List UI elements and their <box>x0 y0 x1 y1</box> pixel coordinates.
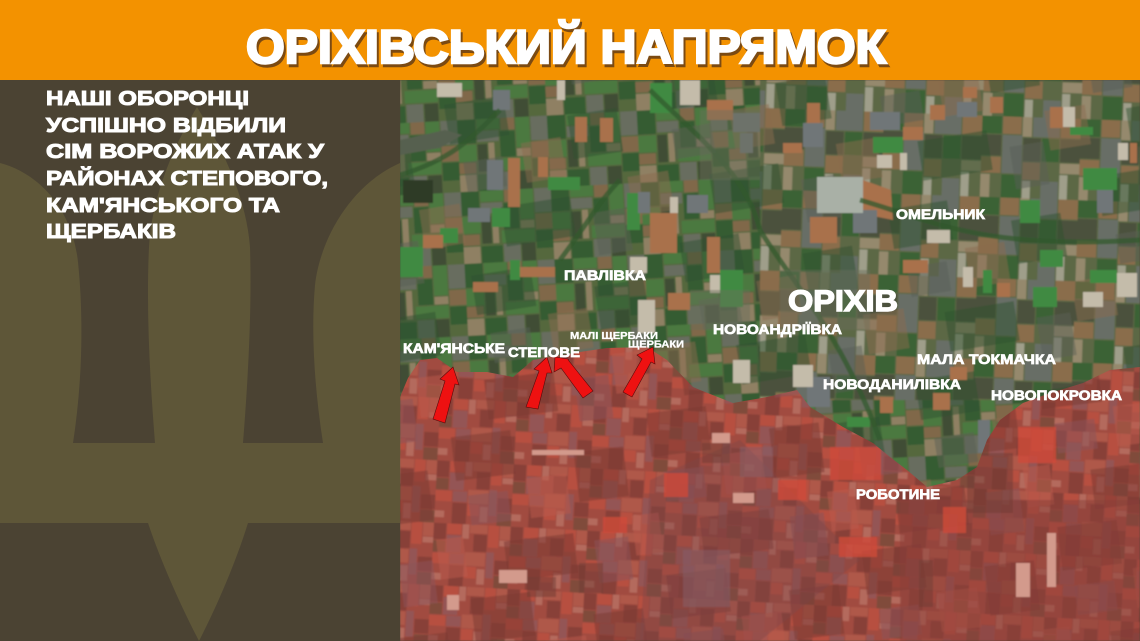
icon: trident emblem <box>0 107 400 641</box>
text block: summary: КАМ'ЯНСЬКОГО ТА <box>46 195 280 217</box>
satellite map <box>400 80 1140 641</box>
title: ОРІХІВСЬКИЙ НАПРЯМОК <box>246 20 886 73</box>
label: Novopokrovka: НОВОПОКРОВКА <box>991 387 1122 403</box>
arrow: toward Shcherbaky <box>623 347 655 397</box>
text block: summary: РАЙОНАХ СТЕПОВОГО, <box>46 166 328 190</box>
label: Shcherbaky: ЩЕРБАКИ <box>628 340 684 350</box>
title: ОРІХІВСЬКИЙ НАПРЯМОК <box>248 23 888 76</box>
label: Novodanylivka: НОВОДАНИЛІВКА <box>823 376 961 392</box>
label: Pavlivka: ПАВЛІВКА <box>564 267 646 283</box>
label: Novoandriivka: НОВОАНДРІЇВКА <box>713 321 842 337</box>
map labels <box>403 206 1122 502</box>
arrow: toward Kamianske <box>433 367 459 423</box>
map terrain: occupied area in red <box>400 340 1140 641</box>
header bar <box>0 0 1140 80</box>
label: Kamianske: КАМ'ЯНСЬКЕ <box>403 340 505 356</box>
text block: summary: ЩЕРБАКІВ <box>46 221 176 243</box>
text block: summary: УСПІШНО ВІДБИЛИ <box>46 115 286 137</box>
text block: summary: НАШІ ОБОРОНЦІ <box>46 88 249 110</box>
arrow: toward Stepove from south <box>526 357 552 409</box>
label: Orikhiv: ОРІХІВ <box>788 285 898 318</box>
label: Omelnyk: ОМЕЛЬНИК <box>896 206 985 222</box>
label: Stepove: СТЕПОВЕ <box>508 344 580 360</box>
panel: left side with trident emblem <box>0 88 400 641</box>
label: Robotyne: РОБОТИНЕ <box>856 486 940 502</box>
text block: summary <box>46 88 328 243</box>
label: Mali Shcherbaky: МАЛІ ЩЕРБАКИ <box>570 331 658 342</box>
arrow: toward Stepove from east <box>554 357 593 398</box>
label: Mala Tokmachka: МАЛА ТОКМАЧКА <box>917 351 1056 367</box>
map terrain: unoccupied fields <box>400 80 1140 500</box>
text block: summary: СІМ ВОРОЖИХ АТАК У <box>46 141 325 163</box>
